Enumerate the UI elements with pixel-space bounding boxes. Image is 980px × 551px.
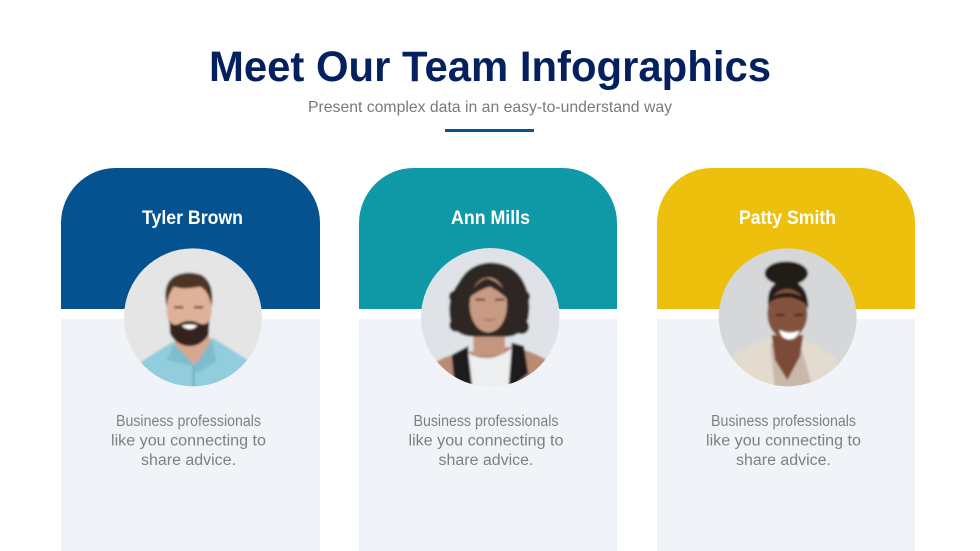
card body: Ann Mills bbox=[359, 319, 617, 551]
description: Patty Smith: Business professionals bbox=[711, 413, 856, 430]
card header: Ann Mills bbox=[359, 168, 617, 309]
card header: Patty Smith bbox=[657, 168, 915, 309]
description: Ann Mills bbox=[408, 413, 564, 469]
description: Ann Mills: share advice. bbox=[438, 452, 534, 469]
subtitle: Present complex data in an easy-to-understand way bbox=[308, 99, 672, 116]
description: Tyler Brown: Business professionals bbox=[116, 413, 261, 430]
portrait: Tyler Brown bbox=[124, 248, 262, 386]
title underline bbox=[445, 129, 534, 132]
portrait: Ann Mills bbox=[421, 248, 560, 384]
card header: Tyler Brown bbox=[61, 168, 320, 309]
description: Patty Smith: like you connecting to bbox=[706, 432, 861, 450]
description: Tyler Brown: share advice. bbox=[141, 452, 236, 469]
panel: Patty Smith bbox=[657, 168, 915, 551]
description: Ann Mills: Business professionals bbox=[414, 413, 559, 430]
name: Patty Smith: Patty Smith bbox=[739, 208, 836, 229]
description: Tyler Brown bbox=[111, 413, 266, 469]
portrait: Patty Smith bbox=[718, 248, 857, 386]
name: Tyler Brown: Tyler Brown bbox=[142, 208, 243, 229]
title: Meet Our Team Infographics bbox=[209, 43, 771, 91]
card body: Patty Smith bbox=[657, 319, 915, 551]
card body: Tyler Brown bbox=[61, 319, 320, 551]
description: Patty Smith bbox=[706, 413, 861, 469]
description: Ann Mills: like you connecting to bbox=[408, 432, 564, 450]
name: Ann Mills: Ann Mills bbox=[451, 208, 530, 229]
description: Patty Smith: share advice. bbox=[736, 452, 831, 469]
description: Tyler Brown: like you connecting to bbox=[111, 432, 266, 450]
panel: Ann Mills bbox=[359, 168, 617, 551]
panel: Tyler Brown bbox=[61, 168, 320, 551]
